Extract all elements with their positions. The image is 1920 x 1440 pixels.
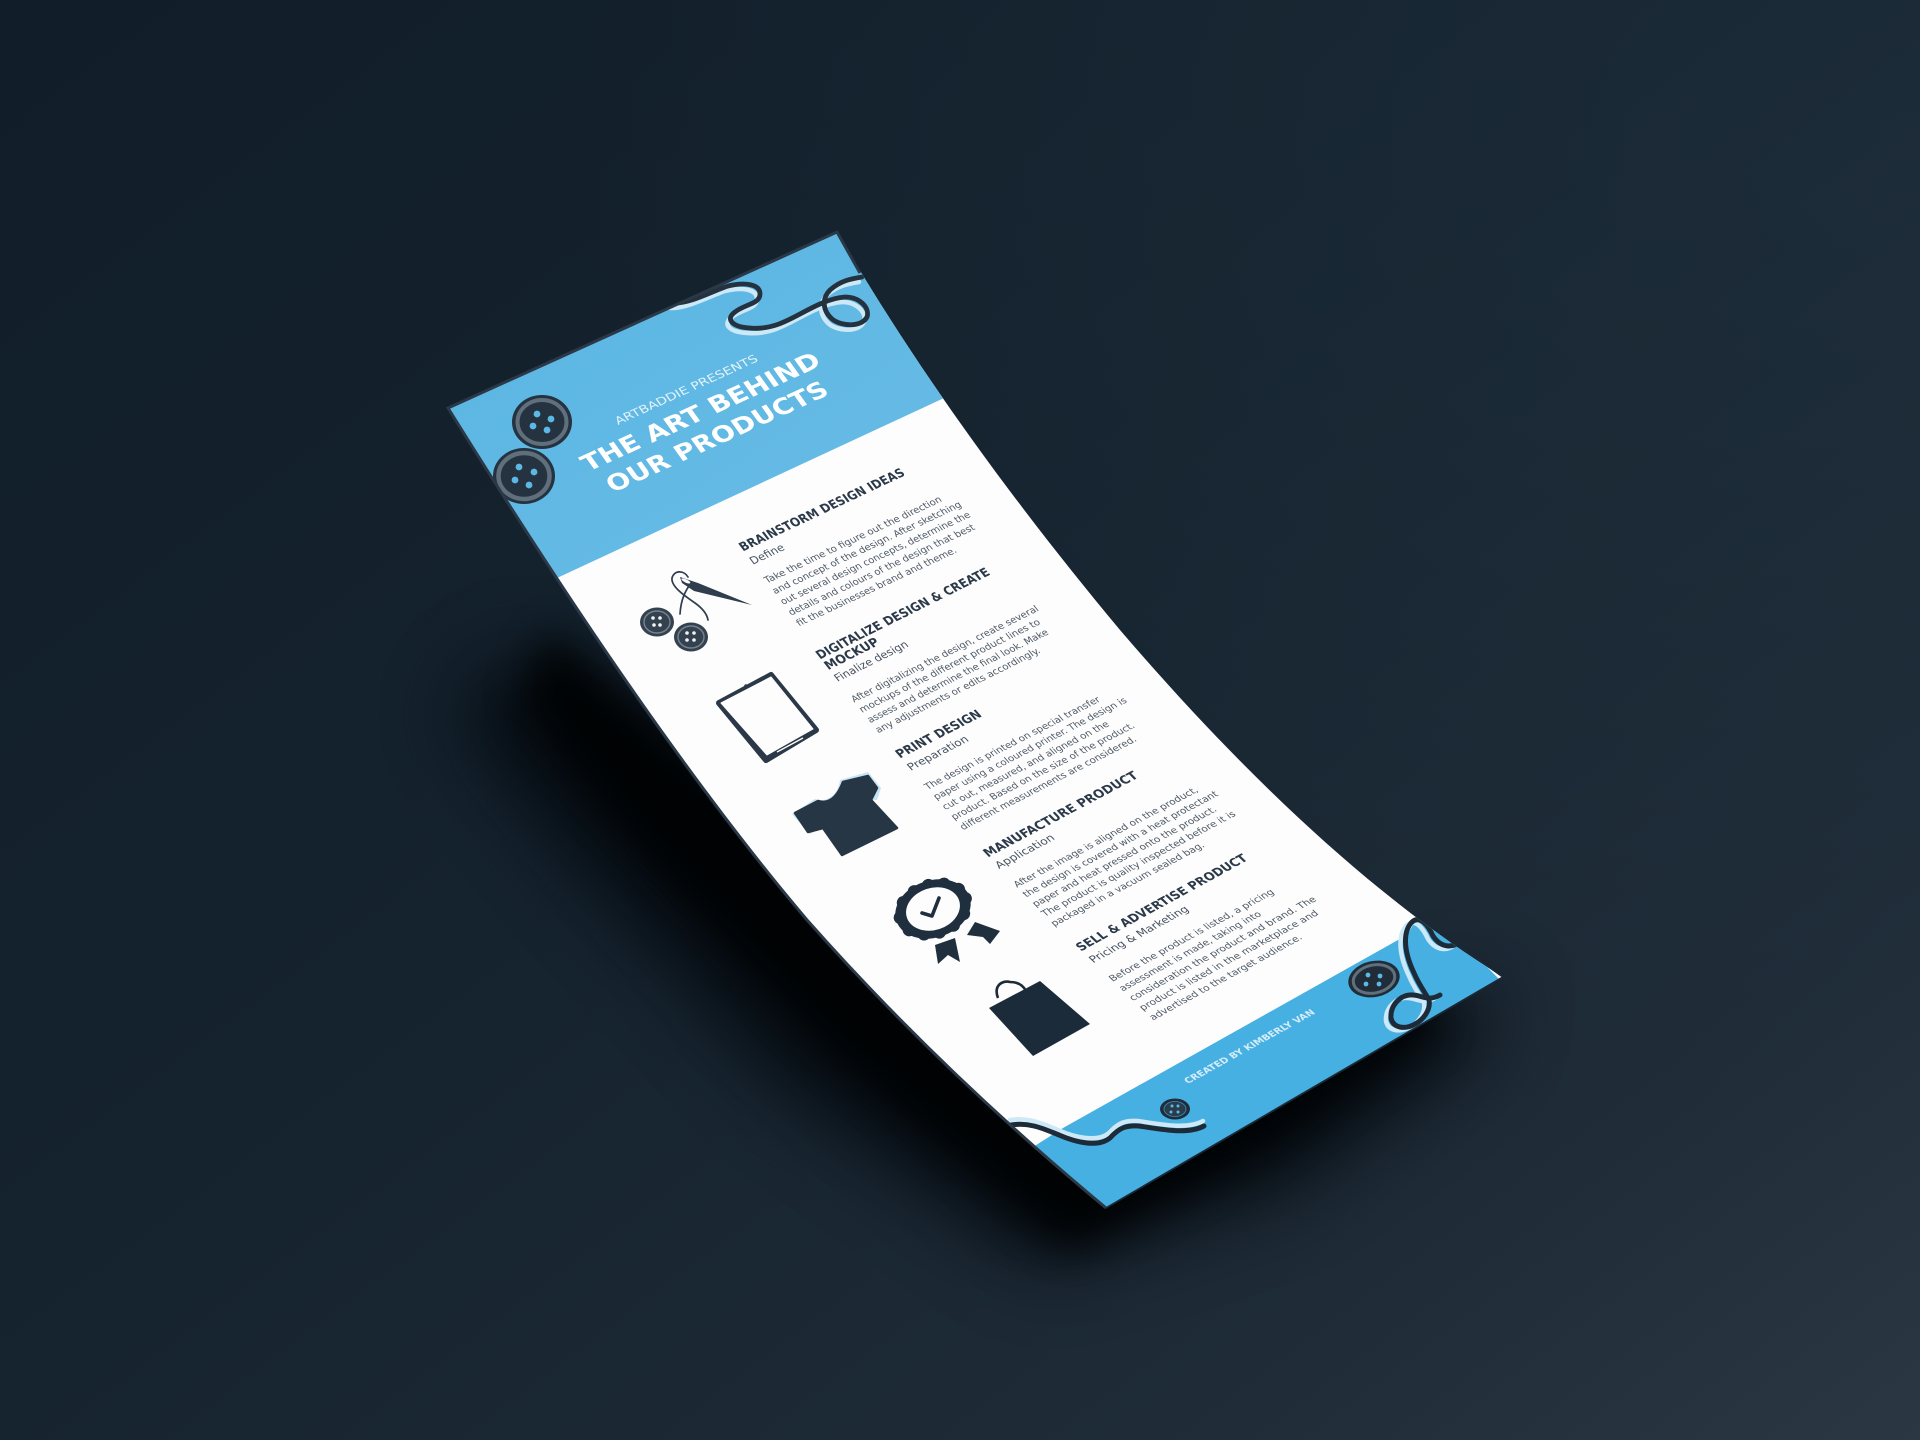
step 4 text: the design is covered with a heat protectant — [1021, 789, 1221, 900]
step 2 text — [813, 559, 1065, 736]
step 5 text: assessment is made, taking into — [1117, 910, 1264, 994]
paper white body — [448, 232, 1503, 1208]
button footer small — [1160, 1098, 1190, 1120]
step 3 text: cut out, measured, and aligned on the — [940, 720, 1112, 812]
thread corner dark — [1391, 920, 1462, 1027]
step 2 text: MOCKUP — [822, 636, 883, 673]
needle eye — [681, 577, 691, 585]
step 3 text: The design is printed on special transfer — [922, 695, 1103, 793]
step 2 text: mockups of the different product lines to — [857, 617, 1043, 715]
icon: needle and buttons — [640, 572, 752, 652]
step 4 text: MANUFACTURE PRODUCT — [980, 769, 1142, 860]
step 3 text: different measurements are considered. — [958, 735, 1139, 832]
step 5 text: product is listed in the marketplace and — [1137, 909, 1321, 1013]
thread corner highlight — [1386, 923, 1457, 1030]
thread footer highlight — [1010, 1119, 1203, 1138]
step 2 text: After digitalizing the design, create several — [849, 604, 1041, 705]
step 2 text: Finalize design — [831, 638, 911, 684]
step 1 text: fit the businesses brand and theme. — [794, 546, 959, 629]
needle thread — [672, 572, 708, 620]
button lower — [493, 448, 555, 504]
step 2 text: any adjustments or edits accordingly. — [873, 646, 1043, 736]
needle — [680, 577, 752, 605]
step 3 text — [892, 652, 1156, 833]
step 2 text: DIGITALIZE DESIGN & CREATE — [813, 566, 993, 663]
thread footer — [1010, 1119, 1204, 1143]
step 4 text: packaged in a vacuum sealed bag. — [1049, 841, 1207, 929]
thread top — [670, 277, 868, 333]
small button right — [674, 622, 708, 652]
paper sheet — [446, 230, 1502, 1209]
title line two: OUR PRODUCTS — [600, 376, 834, 498]
paper drop shadow wide — [450, 650, 1500, 1270]
rosette scallop — [893, 876, 973, 942]
title block — [564, 331, 844, 501]
small button left — [640, 608, 674, 636]
rosette check — [922, 898, 939, 916]
step 2 text: assess and determine the final look. Make — [865, 628, 1051, 725]
thread top dark — [673, 277, 868, 328]
rosette ribbons — [935, 922, 1000, 964]
step 5 text: advertised to the target audience. — [1147, 933, 1305, 1023]
paper edge — [448, 232, 1106, 1208]
step 1 text — [735, 454, 989, 629]
paper drop shadow core — [520, 630, 1440, 1250]
step 1 text: BRAINSTORM DESIGN IDEAS — [736, 466, 908, 555]
step 4 text: The product is quality inspected before it is — [1038, 809, 1239, 920]
clipped colour bands — [450, 234, 1498, 1207]
step 4 text: After the image is aligned on the product, — [1011, 785, 1201, 890]
step 5 text — [1073, 843, 1339, 1023]
step 4 text: Application — [992, 832, 1058, 871]
kicker: ARTBADDIE PRESENTS — [612, 352, 761, 427]
icon: tablet — [719, 675, 816, 760]
paper edge right and bottom — [1106, 921, 1503, 1208]
title line one: THE ART BEHIND — [575, 347, 826, 477]
step 3 text: PRINT DESIGN — [893, 708, 985, 762]
thread footer dark — [1011, 1124, 1204, 1143]
step 3 text: product. Based on the size of the product. — [949, 721, 1138, 822]
header band — [450, 234, 943, 578]
step 1 text: Take the time to figure out the direction — [761, 495, 944, 586]
button top — [512, 395, 572, 449]
icon: t-shirt — [792, 772, 897, 855]
step 5 text: Pricing & Marketing — [1086, 904, 1192, 965]
step 5 text: SELL & ADVERTISE PRODUCT — [1073, 852, 1252, 954]
step 1 text: and concept of the design. After sketching — [770, 500, 964, 597]
step 5 text: consideration the product and brand. The — [1127, 895, 1319, 1003]
step 1 text: Define — [747, 541, 787, 567]
icon: shopping bag — [989, 981, 1090, 1056]
thread top highlight — [670, 282, 865, 333]
step 1 text: details and colours of the design that best — [786, 522, 978, 618]
thread corner — [1386, 920, 1462, 1030]
footer credit: CREATED BY KIMBERLY VAN — [1182, 1008, 1318, 1086]
step 1 text: out several design concepts, determine the — [778, 510, 973, 607]
step 4 text: paper and heat pressed onto the product. — [1030, 805, 1220, 909]
step 3 text: Preparation — [904, 733, 972, 773]
step 3 text: paper using a coloured printer. The design is — [931, 696, 1130, 802]
step 5 text: Before the product is listed, a pricing — [1107, 888, 1277, 984]
icon: rosette badge — [893, 876, 1000, 964]
button footer large — [1348, 960, 1400, 998]
footer band — [1036, 918, 1498, 1207]
step 4 text — [979, 747, 1249, 929]
